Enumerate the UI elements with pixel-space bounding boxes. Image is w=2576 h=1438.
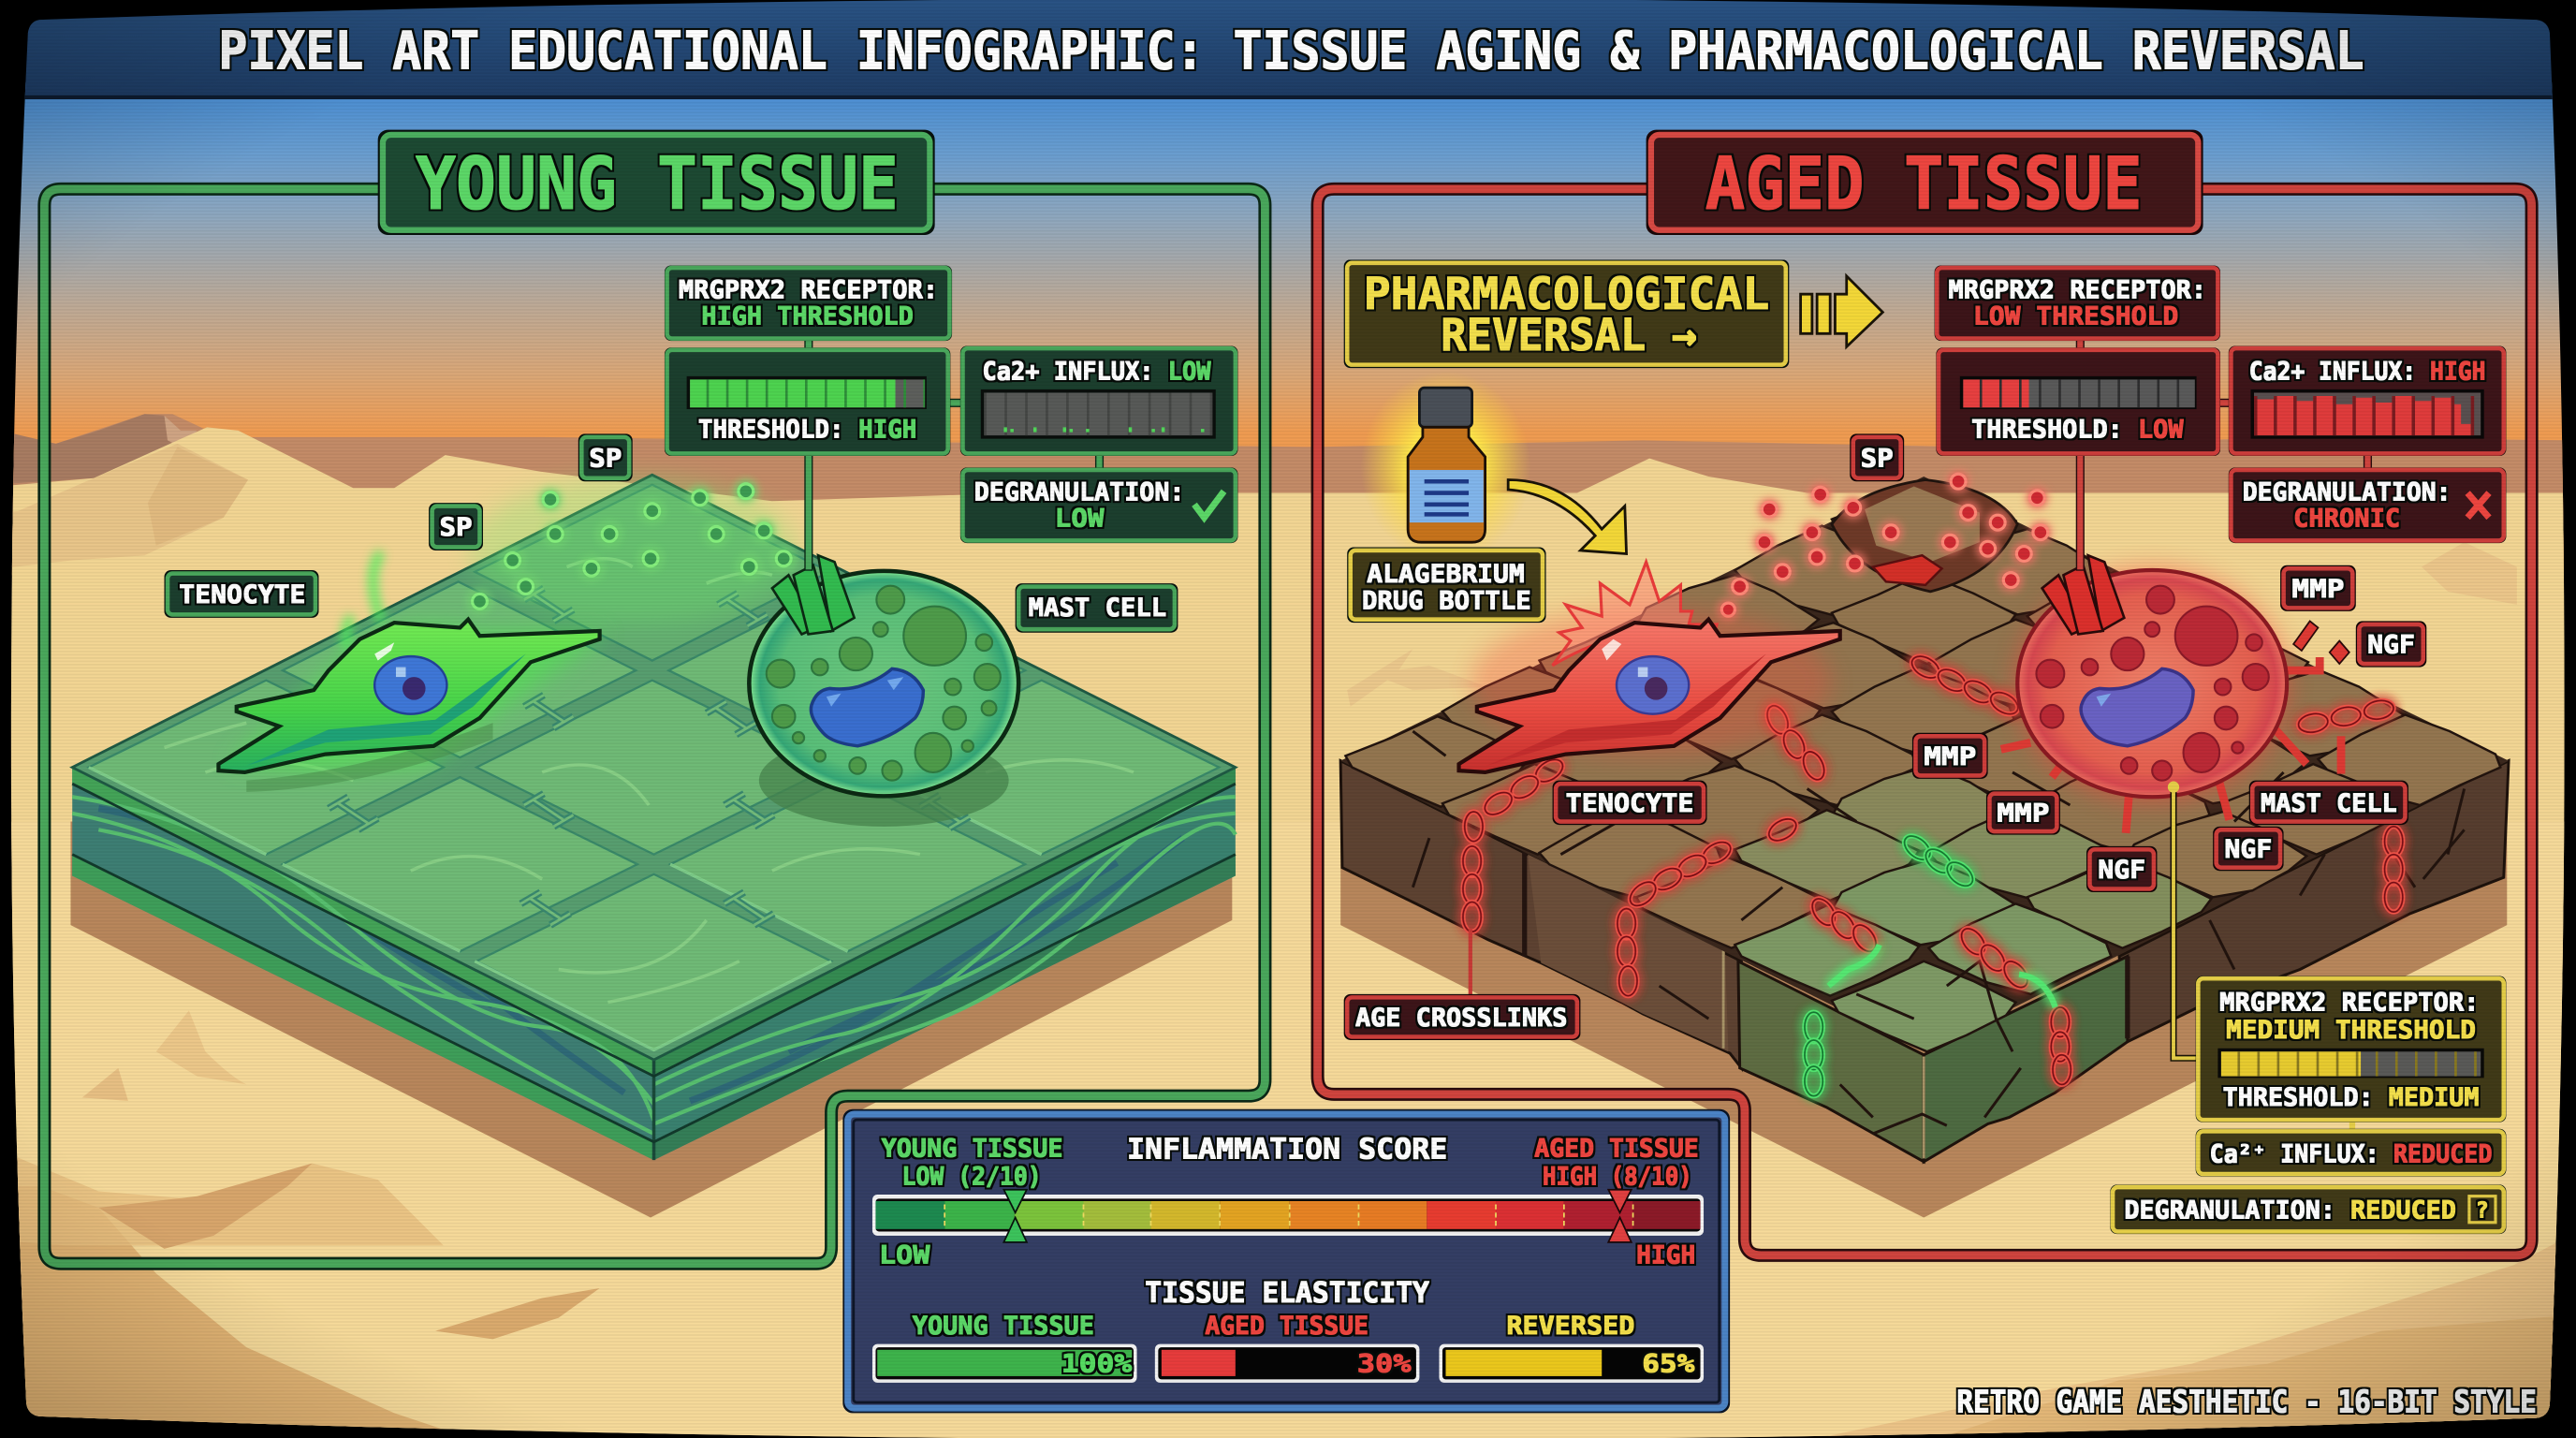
label: MMP upper bbox=[2280, 565, 2356, 611]
status: young degranulation: DEGRANULATION: bbox=[974, 478, 1184, 506]
gauge: young threshold: THRESHOLD: HIGH bbox=[698, 417, 916, 445]
elasticity: aged tissue: AGED TISSUE bbox=[1205, 1313, 1368, 1341]
label: SP aged: SP bbox=[1861, 445, 1894, 473]
inflammation score labels: AGED TISSUE bbox=[1534, 1136, 1699, 1164]
icon: question box bbox=[2469, 1196, 2496, 1223]
label: alagebrium drug bottle: ALAGEBRIUM bbox=[1367, 561, 1525, 589]
leader line: treated receptor bbox=[2168, 782, 2198, 1058]
leader line: age crosslinks bbox=[1470, 929, 1471, 996]
icon: alagebrium drug bottle bbox=[1360, 372, 1531, 562]
elasticity: reversed: 65% bbox=[1642, 1351, 1695, 1379]
label: SP aged bbox=[1850, 433, 1904, 481]
scale ends: LOW bbox=[879, 1242, 930, 1270]
status: treated degranulation: ? bbox=[2476, 1199, 2489, 1224]
heading: aged tissue bbox=[1647, 130, 2203, 235]
gauge: aged calcium influx: Ca2+ INFLUX: HIGH bbox=[2249, 358, 2485, 386]
status: treated degranulation bbox=[2110, 1184, 2506, 1234]
aged tissue cracked platform bbox=[1340, 477, 2509, 1162]
elasticity: reversed bbox=[1439, 1313, 1704, 1383]
gauge: treated medium threshold bbox=[2196, 976, 2506, 1123]
label: NGF right: NGF bbox=[2224, 836, 2272, 864]
title bar bbox=[0, 0, 2576, 99]
label: MMP centre-right: MMP bbox=[1997, 800, 2049, 829]
inflammation score labels: YOUNG TISSUE bbox=[882, 1136, 1063, 1164]
status: treated calcium influx: Ca²⁺ INFLUX: REDUCED bbox=[2210, 1141, 2492, 1169]
elasticity: young tissue: 100% bbox=[1061, 1351, 1132, 1379]
label: pharmacological reversal bbox=[1344, 259, 1789, 368]
label: NGF centre: NGF bbox=[2098, 857, 2145, 885]
tenocyte: aged bbox=[1459, 562, 1840, 772]
heading: aged tissue: AGED TISSUE bbox=[1705, 142, 2143, 227]
raised rubble block bbox=[1832, 479, 2017, 592]
label: mast cell aged bbox=[2249, 781, 2408, 825]
label: alagebrium drug bottle bbox=[1347, 547, 1546, 623]
label: age crosslinks: AGE CROSSLINKS bbox=[1355, 1005, 1567, 1033]
label: age crosslinks bbox=[1344, 994, 1580, 1040]
arrow: bottle to tenocyte bbox=[1508, 479, 1627, 553]
label: MMP centre-left: MMP bbox=[1924, 743, 1976, 771]
label: NGF centre bbox=[2086, 846, 2157, 892]
label: MMP centre-left bbox=[1912, 733, 1988, 779]
label: young MRGPRX2 receptor bbox=[665, 265, 952, 341]
label: aged MRGPRX2 receptor: LOW THRESHOLD bbox=[1973, 303, 2178, 331]
label: young MRGPRX2 receptor: HIGH THRESHOLD bbox=[701, 303, 914, 331]
panel frame: aged tissue bbox=[1318, 189, 2532, 1255]
marker: aged score 8/10 bbox=[1608, 1190, 1632, 1242]
elasticity: aged tissue bbox=[1155, 1313, 1419, 1383]
gauge: treated medium threshold: MRGPRX2 RECEPTOR: bbox=[2219, 989, 2479, 1017]
connector lines: aged receptor bbox=[2076, 339, 2371, 570]
gauge: treated medium threshold: THRESHOLD: MEDIUM bbox=[2223, 1084, 2479, 1112]
main title: PIXEL ART EDUCATIONAL INFOGRAPHIC: TISSUE AGING & PHARMACOLOGICAL REVERSAL bbox=[218, 22, 2364, 82]
scoreboard panel bbox=[842, 1109, 1730, 1413]
tile marble swirls bbox=[165, 559, 1134, 1003]
status: aged degranulation: CHRONIC bbox=[2293, 506, 2400, 534]
inflammation score labels bbox=[882, 1133, 1699, 1191]
gauge: aged calcium influx bbox=[2229, 345, 2506, 456]
platform sides bbox=[72, 768, 654, 1160]
red chains bbox=[1463, 652, 2403, 1084]
AGE crosslink chains bbox=[1463, 652, 2403, 1096]
spiky aura bbox=[1553, 562, 1717, 666]
label: tenocyte young bbox=[165, 570, 318, 618]
gauge: aged threshold: THRESHOLD: LOW bbox=[1971, 417, 2184, 445]
label: alagebrium drug bottle: DRUG BOTTLE bbox=[1362, 587, 1531, 615]
connector: treated receptor to influx bbox=[2349, 1119, 2355, 1132]
cracked brown blocks bbox=[1345, 479, 2500, 948]
gauge: young threshold bbox=[665, 347, 950, 456]
nucleus bbox=[811, 668, 923, 746]
substance P particles: young bbox=[473, 484, 791, 609]
mast cell: aged bbox=[2001, 555, 2349, 833]
label: mast cell young bbox=[1016, 583, 1178, 633]
top surface base bbox=[1340, 477, 2509, 1051]
label: SP upper young bbox=[578, 433, 633, 481]
label: aged MRGPRX2 receptor bbox=[1935, 265, 2220, 341]
status: treated degranulation: DEGRANULATION: REDUCED bbox=[2124, 1196, 2456, 1225]
substance P particles: aged bbox=[1721, 474, 2048, 616]
status: young degranulation: LOW bbox=[1055, 506, 1105, 534]
jigsaw connectors bbox=[329, 588, 970, 925]
nucleus eye bbox=[374, 656, 446, 714]
label: pharmacological reversal: PHARMACOLOGICAL bbox=[1364, 269, 1769, 320]
released MMP and NGF tendrils bbox=[2001, 657, 2341, 833]
label: pharmacological reversal: REVERSAL → bbox=[1441, 310, 1697, 361]
nucleus bbox=[2081, 668, 2193, 746]
young tissue platform shadow bbox=[70, 822, 1232, 1218]
status: young degranulation bbox=[960, 467, 1237, 543]
icon: check mark bbox=[1194, 492, 1224, 518]
inflammation score labels: HIGH (8/10) bbox=[1543, 1163, 1692, 1191]
mossy front sides bbox=[1738, 961, 1924, 1162]
inflammation score labels: INFLAMMATION SCORE bbox=[1127, 1133, 1447, 1166]
mast cell: young bbox=[749, 555, 1018, 827]
icon: X mark bbox=[2467, 493, 2489, 518]
tenocyte: young bbox=[218, 552, 607, 792]
cracks bbox=[1412, 640, 2465, 1134]
status: aged degranulation: DEGRANULATION: bbox=[2243, 478, 2452, 506]
marker: young score 2/10 bbox=[1003, 1190, 1027, 1242]
label: aged MRGPRX2 receptor: MRGPRX2 RECEPTOR: bbox=[1949, 277, 2206, 305]
label: MMP upper: MMP bbox=[2291, 576, 2345, 604]
arrow: reversal bbox=[1801, 276, 1882, 346]
elasticity: young tissue bbox=[872, 1313, 1137, 1383]
label: tenocyte young: TENOCYTE bbox=[179, 581, 305, 609]
MRGPRX2 crystal receptor bbox=[2042, 555, 2124, 634]
wisp glow bbox=[345, 552, 381, 649]
label: SP lower young bbox=[429, 503, 483, 550]
panel frame: young tissue bbox=[44, 189, 1265, 1264]
status: treated calcium influx bbox=[2196, 1129, 2506, 1177]
green repaired chains bbox=[1805, 831, 2056, 1096]
inflammation score labels: LOW (2/10) bbox=[902, 1163, 1042, 1191]
tissue elasticity heading: TISSUE ELASTICITY bbox=[1145, 1277, 1429, 1310]
top surface bbox=[72, 475, 1236, 1060]
label: NGF upper bbox=[2356, 621, 2426, 668]
label: SP upper young: SP bbox=[589, 445, 622, 473]
released fragments bbox=[2293, 621, 2349, 664]
label: mast cell young: MAST CELL bbox=[1029, 594, 1166, 623]
young tissue isometric matrix platform bbox=[72, 475, 1236, 1160]
label: young MRGPRX2 receptor: MRGPRX2 RECEPTOR: bbox=[679, 277, 938, 305]
label: SP lower young: SP bbox=[439, 514, 473, 542]
label: NGF right bbox=[2213, 827, 2284, 871]
elasticity: young tissue: YOUNG TISSUE bbox=[913, 1313, 1094, 1341]
block sides: left brown bbox=[1340, 761, 1741, 1068]
gauge: young calcium influx bbox=[960, 345, 1237, 456]
status: aged degranulation bbox=[2229, 467, 2506, 543]
label: MMP centre-right bbox=[1986, 790, 2060, 835]
label: NGF upper: NGF bbox=[2367, 632, 2415, 660]
label: mast cell aged: MAST CELL bbox=[2261, 790, 2397, 818]
gauge: young calcium influx: Ca2+ INFLUX: LOW bbox=[983, 358, 1211, 386]
inflammation gradient bar bbox=[872, 1190, 1704, 1242]
substance P green aura bbox=[468, 477, 797, 624]
aged tissue platform shadow bbox=[1340, 822, 2507, 1218]
matrix tiles bbox=[89, 485, 1219, 1050]
heading: young tissue: YOUNG TISSUE bbox=[416, 142, 899, 227]
elasticity: reversed: REVERSED bbox=[1506, 1313, 1634, 1341]
scale high end: HIGH bbox=[1636, 1242, 1695, 1270]
label: tenocyte aged: TENOCYTE bbox=[1566, 790, 1694, 818]
connector: young receptor lines bbox=[805, 339, 1103, 570]
gauge: aged threshold bbox=[1936, 347, 2220, 456]
MRGPRX2 crystal receptor bbox=[772, 555, 855, 634]
mossy recovering blocks bbox=[1734, 766, 2211, 1051]
label: tenocyte aged bbox=[1553, 781, 1707, 825]
block sides: right brown bbox=[2119, 761, 2509, 1042]
elasticity: aged tissue: 30% bbox=[1357, 1351, 1412, 1379]
gauge: treated medium threshold: MEDIUM THRESHOLD bbox=[2226, 1017, 2476, 1045]
